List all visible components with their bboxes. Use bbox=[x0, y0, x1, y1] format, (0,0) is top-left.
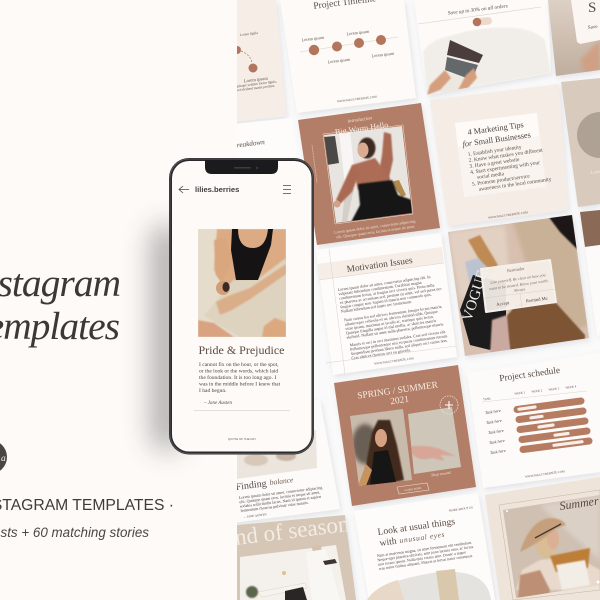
card: finding balance: — JANE AUSTEN bbox=[242, 512, 268, 519]
card: motivation issues: Cras ultrices rhoncus orci eu gravida. bbox=[351, 347, 411, 360]
card: left process steps: Quisque sodales lorem ligula, bbox=[235, 79, 277, 90]
badge: canva: a bbox=[1, 454, 6, 464]
card: spring summer 2021 bbox=[334, 365, 476, 506]
card: top right beige bbox=[548, 0, 600, 76]
card: end of season: End of season bbox=[219, 511, 351, 552]
card: finding balance: elit. Quisque quam eros, lacinia et neque sit amet, bbox=[239, 489, 321, 505]
card: photo with reminder dialog: Remind Me bbox=[526, 296, 548, 304]
card: look at usual things: Nam at maecenas magna, sit amet fermentum elit vestibulum. bbox=[377, 541, 473, 559]
nav bar: account name: lilies.berries bbox=[195, 185, 239, 194]
card: finding balance: balance bbox=[269, 475, 294, 487]
card: finding balance bbox=[237, 404, 342, 525]
card: photo with reminder dialog: VOGUE bbox=[460, 268, 491, 323]
title: Instagram Templates bbox=[0, 261, 120, 348]
card: big warm hello: introduction bbox=[347, 116, 373, 125]
card: finding balance: Lorem ipsum dolor sit amet, consectetur adipiscing bbox=[239, 485, 323, 501]
card: project schedule: Task here bbox=[486, 418, 502, 425]
card: photo with reminder dialog: Always. bbox=[512, 286, 526, 293]
card: motivation issues: ullamcorper vehicula ex ut, ultrices eleifend nibh. Quisque bbox=[344, 309, 438, 328]
card: right column photo and text bbox=[580, 210, 600, 336]
card: motivation issues: eleifend. Nullam sit amet nulla pharetra, pellentesque mauris. bbox=[346, 321, 444, 341]
card: big warm hello: Big Warm Hello bbox=[334, 120, 389, 137]
card: project schedule bbox=[467, 353, 600, 488]
card: photo with reminder dialog: want to be treated. Know your worth. bbox=[489, 278, 549, 291]
card: motivation issues: Pellentesque pellentesque nisi eu purus condimentum rutrum. bbox=[350, 333, 448, 352]
card: look at usual things: cras tortor finibus aliquam. Mauris at lectus tortor consequat. bbox=[378, 554, 473, 571]
card: motivation issues: feugiat congue non. Sapien id mauris non commodo quis. bbox=[340, 292, 432, 309]
phone photo bbox=[198, 229, 286, 337]
card: project timeline: WWW.MAGCYBERSITE.COM bbox=[337, 95, 377, 103]
card: look at usual things: Neque eget pharetra ultricies, ante justo lacinia urna, ac luctus bbox=[377, 545, 474, 563]
phone mockup bbox=[169, 158, 314, 454]
card: look at usual things: MORE ABOUT US bbox=[449, 505, 473, 513]
left cover panel bbox=[0, 0, 237, 600]
card: project schedule: WEEK 4 bbox=[565, 384, 577, 390]
nav bar: menu icon bbox=[283, 186, 291, 194]
card: look at usual things bbox=[354, 493, 495, 600]
card: big warm hello: Lorem ipsum dolor sit amet, consectetur adipiscing bbox=[334, 218, 416, 236]
phone shadow bbox=[152, 225, 182, 450]
card: motivation issues: Mauris et orci in orci maximus sodales. Cras sed viverra elit. bbox=[349, 329, 446, 347]
card: project schedule: TASK bbox=[483, 396, 492, 402]
card: photo with reminder dialog: Reminder bbox=[507, 266, 525, 273]
card: motivation issues bbox=[316, 233, 457, 375]
card: left process steps bbox=[225, 0, 286, 123]
card: top right beige: S bbox=[588, 0, 596, 16]
card: project timeline: Lorem ipsum bbox=[346, 29, 370, 36]
card: spring summer 2021: 2021 bbox=[390, 395, 410, 407]
card: photo with reminder dialog: Live yourself. Be clear on how you bbox=[489, 272, 546, 285]
card: project timeline: Lorem ipsum bbox=[371, 51, 395, 58]
phone footer: QUOTE OF THE DAY bbox=[228, 437, 256, 441]
card: 4 marketing tips: 2. Know what makes you different bbox=[468, 147, 544, 164]
phone notch bbox=[205, 160, 278, 174]
card: breakdown note bbox=[225, 118, 297, 166]
card: project schedule: Task here bbox=[490, 448, 506, 455]
background: card field bbox=[237, 0, 600, 600]
phone quote bbox=[199, 361, 281, 394]
phone quote: I had begun. bbox=[199, 388, 227, 394]
card: project timeline: Lorem ipsum bbox=[301, 35, 325, 42]
phone quote: was in the middle before I knew that bbox=[199, 380, 281, 388]
card: finding balance: fermentum rhoncus pulvinar vitae mauris. bbox=[240, 500, 309, 513]
phone quote: or the look or the words, which laid bbox=[199, 368, 278, 374]
card: motivation issues: Nam cursus leo sed ultrices fermentum. Integer lectus mauris, bbox=[344, 304, 443, 323]
phone quote: the foundation. It is too long ago. I bbox=[199, 374, 276, 381]
card: spring summer 2021: LEARN MORE bbox=[404, 487, 422, 492]
card: project schedule: WEEK 1 bbox=[514, 390, 526, 396]
card: motivation issues: vulputate bibendum condimentum. Curabitur magna bbox=[338, 280, 422, 296]
card: finding balance: Finding bbox=[235, 478, 267, 493]
card: project schedule: WWW.MAGCYBERSITE.COM bbox=[525, 469, 565, 479]
card: spring summer 2021: SPRING / SUMMER bbox=[357, 380, 439, 402]
card: big warm hello bbox=[298, 103, 440, 245]
card: project timeline: Lorem ipsum bbox=[327, 57, 351, 64]
card: 4 marketing tips bbox=[430, 84, 568, 226]
card: motivation issues: WWW.MAGCYBERSITE.COM bbox=[374, 356, 414, 366]
card: motivation issues: Lorem ipsum dolor sit amet, consectetur adipiscing elit. In bbox=[337, 274, 431, 293]
card: 4 marketing tips: 1. Establish your identity bbox=[467, 144, 522, 158]
card: save up with laptop photo bbox=[414, 0, 551, 95]
card: finding balance: sodales sollicitudin lacus. Nam id ipsum et sapien bbox=[240, 494, 321, 509]
card: motivation issues: Quisque fringilla augue id nisl mollis, ac ultricies mauris bbox=[346, 318, 437, 336]
phone quote: I cannot fix on the hour, or the spot, bbox=[199, 361, 279, 368]
card: 4 marketing tips: 4 Marketing Tips bbox=[467, 120, 524, 137]
card: 4 marketing tips: 4. Start experimenting with your bbox=[470, 160, 541, 176]
card: look at usual things: Look at usual things bbox=[377, 516, 456, 538]
card: project schedule: WEEK 2 bbox=[531, 388, 543, 394]
card: motivation issues: Suspendisse pretium libero nulla, sed aliquet orci varius non. bbox=[350, 338, 448, 357]
card: big warm hello: elit. Quisque quam eros, lacinia et neque sit amet. bbox=[336, 223, 416, 241]
phone title: Pride & Prejudice bbox=[198, 343, 284, 357]
card: 4 marketing tips: awareness in the local community bbox=[478, 177, 552, 193]
card: end of season bbox=[237, 515, 358, 600]
card: project schedule: Project schedule bbox=[499, 366, 561, 384]
card: save up with laptop photo: Save up to 30% on all orders bbox=[448, 3, 508, 17]
card: 4 marketing tips: 3. Have a great website bbox=[469, 157, 520, 170]
card: top right beige: Save bbox=[588, 25, 599, 31]
card: motivation issues: condimentum lectus, at feugiat orci viverra quis. Proin nulla bbox=[339, 282, 435, 302]
card: left process steps: vel eleifend mattis porttitor. bbox=[236, 84, 276, 92]
card: project schedule: Task here bbox=[485, 408, 501, 415]
card: look at usual things: with bbox=[379, 536, 398, 549]
card: project schedule: Task here bbox=[489, 438, 505, 445]
card: motivation issues: Motivation Issues bbox=[346, 256, 414, 275]
card: look at usual things: unusual eyes bbox=[399, 530, 446, 545]
card: photo with reminder dialog bbox=[448, 212, 589, 356]
card: spring summer 2021: Shop around bbox=[431, 471, 451, 477]
card: right beige circle bbox=[561, 78, 600, 207]
card: motivation issues: ex pharetra ac accumsan sed, pretium sit amet, vel sed purus nec bbox=[339, 286, 443, 306]
card: look at usual things: non cursus ipsum. Nulla quis cursus ante. Donec a augue bbox=[378, 550, 466, 567]
card: summer tea bbox=[485, 477, 600, 600]
card: 4 marketing tips: 5. Promote product/service bbox=[472, 174, 531, 188]
phone signature: – Jane Austen bbox=[203, 401, 232, 406]
card: left process steps: Lorem ligula bbox=[240, 31, 259, 37]
card: 4 marketing tips: for Small Businesses bbox=[462, 130, 531, 149]
card: project timeline bbox=[280, 0, 416, 113]
nav bar: back arrow bbox=[179, 186, 189, 193]
card: motivation issues: vitae ipsum, maximus ut iaculis ac, tristique quis lectus. bbox=[345, 314, 434, 332]
card: breakdown note: breakdown bbox=[233, 138, 266, 150]
badge: canva bbox=[0, 440, 7, 474]
card: 4 marketing tips: social media bbox=[477, 171, 505, 181]
card: project schedule: Task here bbox=[488, 428, 504, 435]
card: left process steps: Lorem ipsum bbox=[244, 75, 269, 83]
card: 4 marketing tips: WWW.MAGCYBERSITE.COM bbox=[488, 210, 528, 220]
card: photo with reminder dialog: Accept bbox=[496, 300, 510, 307]
card: motivation issues: Nullam bibendum sed turpis nec fermentum. bbox=[341, 299, 412, 314]
card: project schedule: WEEK 3 bbox=[548, 386, 560, 392]
